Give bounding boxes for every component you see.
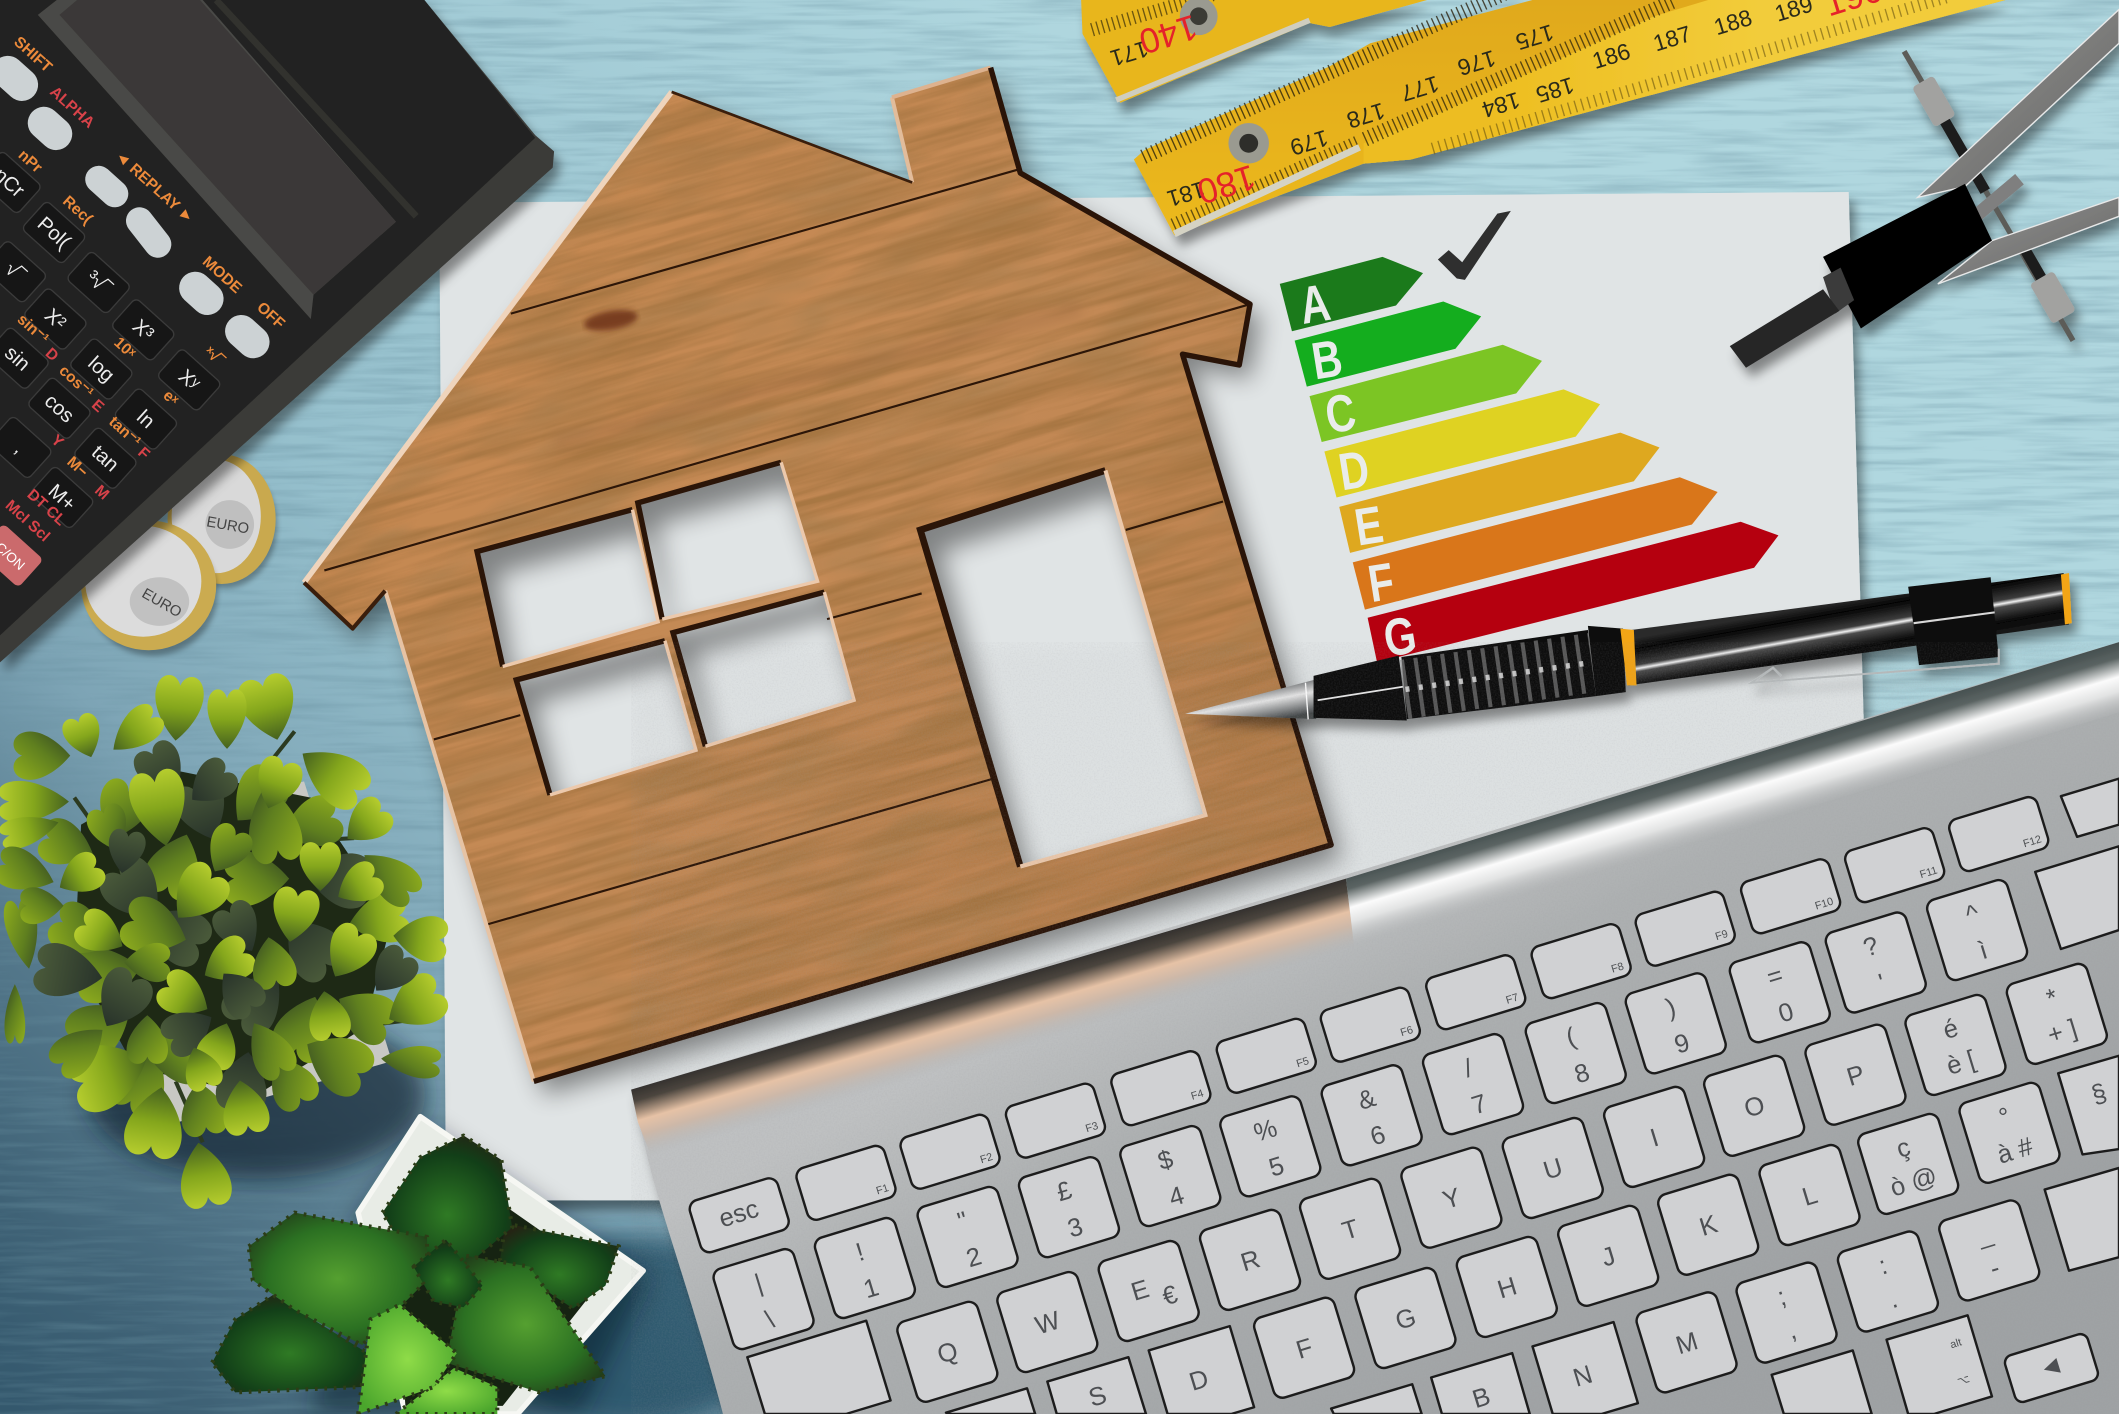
succulent leaves <box>212 1136 619 1414</box>
calculator keys: √‾ <box>0 258 29 287</box>
succulent shadow <box>311 1122 649 1414</box>
house edges <box>304 68 1331 1081</box>
rating bar C <box>1310 345 1542 445</box>
number key row: 8 <box>1571 1058 1593 1089</box>
bottom letter key row: : <box>1876 1252 1891 1281</box>
QWERTY key row: P <box>1844 1060 1868 1092</box>
rating bar D: D <box>1335 438 1373 501</box>
function key row: F5 <box>1295 1055 1311 1070</box>
wireless keyboard <box>631 642 2119 1414</box>
check mark <box>1438 211 1511 280</box>
rating bar D <box>1324 389 1600 501</box>
calculator keys: log <box>83 352 118 387</box>
lower ruler segment: 178 <box>1344 98 1388 134</box>
compass head block <box>1823 184 1992 328</box>
number key row: ( <box>1563 1023 1580 1052</box>
modifier and arrow keys <box>1772 1315 2100 1414</box>
number key row: / <box>1461 1054 1477 1083</box>
lower ruler segment: 185 <box>1533 72 1577 108</box>
number key row: ! <box>853 1238 868 1267</box>
calculator key legends: Rec( <box>59 193 96 228</box>
rating bar G: G <box>1379 605 1420 668</box>
calculator body <box>0 0 554 662</box>
bottom letter key row: B <box>1469 1382 1494 1414</box>
function key row: F1 <box>875 1182 890 1197</box>
QWERTY key row: * <box>2043 984 2061 1013</box>
calculator key legends: sin⁻¹ <box>14 311 52 348</box>
compass arms <box>1918 9 2119 197</box>
wooden house <box>302 66 1354 1106</box>
window frame cut edges <box>477 462 854 795</box>
rating bar A <box>1280 257 1423 335</box>
calculator key legends: cos⁻¹ <box>55 362 97 402</box>
calculator key legends: nPr <box>15 147 45 177</box>
calculator keys: ln <box>132 406 159 433</box>
number key row: ? <box>1860 932 1882 963</box>
keyboard body <box>631 642 2119 1414</box>
lower ruler segment: 181 <box>1164 176 1208 212</box>
function key row: F7 <box>1504 992 1520 1007</box>
function key row: F4 <box>1190 1088 1205 1103</box>
calculator keys: tan <box>87 441 123 476</box>
home key row: D <box>1186 1365 1212 1397</box>
number key row: ) <box>1663 993 1679 1023</box>
QWERTY key row: Y <box>1440 1183 1464 1215</box>
QWERTY key row: Q <box>934 1337 961 1370</box>
foreground leaves <box>0 670 453 1211</box>
background leaves <box>34 736 412 1139</box>
calculator keys: sin <box>0 342 34 376</box>
plant shadow <box>88 1011 426 1179</box>
rating bar E: E <box>1351 494 1387 557</box>
calculator key legends: SHIFT <box>10 33 55 76</box>
function key row: F9 <box>1714 928 1729 943</box>
number key row: 6 <box>1367 1121 1389 1152</box>
calculator keys: , <box>10 438 29 458</box>
upper ruler segment <box>1081 0 1427 103</box>
QWERTY key row: I <box>1647 1124 1662 1153</box>
calculator key legends: tan⁻¹ <box>105 413 144 451</box>
green leafy plant <box>0 670 453 1211</box>
calculator key legends: OFF <box>253 299 288 332</box>
QWERTY key row: E <box>1128 1275 1152 1307</box>
pencil clip <box>1908 577 1999 665</box>
calculator key legends: M <box>91 482 112 503</box>
home key row: ç <box>1893 1133 1914 1164</box>
function key row: F8 <box>1610 960 1625 976</box>
wood texture <box>307 70 1328 1078</box>
calculator keys: Pol( <box>33 213 74 253</box>
bottom letter key row: M <box>1673 1327 1701 1360</box>
calculator key legends: ◄ REPLAY ► <box>111 147 197 227</box>
calculator key legends <box>2 33 288 545</box>
rating bar A: A <box>1295 272 1334 335</box>
number key row: ' <box>1876 969 1889 997</box>
coins <box>81 454 277 656</box>
number key row: ì <box>1976 936 1991 965</box>
calculator key legends: M− <box>63 453 91 481</box>
number key row: 3 <box>1064 1212 1086 1243</box>
calculator key legends: McI Scl <box>2 497 53 545</box>
number key row: = <box>1764 961 1786 992</box>
bottom letter key row: ; <box>1774 1283 1789 1312</box>
bottom letter key row: , <box>1785 1316 1800 1345</box>
calculator key legends: ALPHA <box>46 83 97 132</box>
home key row <box>946 1056 2119 1414</box>
lower ruler segment: 179 <box>1287 125 1331 161</box>
calculator key legends: E <box>88 396 107 416</box>
house shadow <box>315 81 1342 1095</box>
lower ruler segment: 177 <box>1398 71 1442 107</box>
coins: EURO <box>139 586 184 621</box>
rating bar E <box>1339 433 1660 557</box>
calculator keys: Xʸ <box>174 366 204 396</box>
number key row: " <box>954 1207 971 1236</box>
home key row: L <box>1799 1181 1821 1212</box>
adjustment screw <box>1904 51 2076 341</box>
energy rating label <box>1280 211 1778 668</box>
number key row: 4 <box>1166 1181 1188 1212</box>
number key row: ^ <box>1963 899 1982 930</box>
ribbed grip <box>1401 630 1596 719</box>
lower ruler segment: 188 <box>1711 4 1755 40</box>
home key row: ò @ <box>1887 1162 1941 1202</box>
home key row: H <box>1494 1272 1520 1304</box>
number key row: \ <box>762 1305 778 1334</box>
home key row: ° <box>1996 1103 2014 1132</box>
calculator key legends: 10ˣ <box>110 334 139 362</box>
plant pot <box>65 781 392 1125</box>
pencil barrel <box>1628 573 2069 685</box>
home key row: F <box>1293 1333 1316 1365</box>
number key row: £ <box>1053 1176 1075 1207</box>
lower ruler segment: 187 <box>1650 20 1694 56</box>
QWERTY key row <box>747 962 2109 1414</box>
number key row: 9 <box>1671 1029 1693 1060</box>
calculator keys <box>0 150 222 592</box>
function key row: F11 <box>1918 864 1939 881</box>
sheet of paper <box>439 192 1865 1200</box>
bottom letter key row: - <box>1987 1254 2003 1283</box>
number key row: % <box>1251 1114 1281 1148</box>
rating bar C: C <box>1321 382 1360 445</box>
home key row: à # <box>1994 1132 2037 1170</box>
number key row: 0 <box>1775 998 1797 1029</box>
plank seams <box>324 169 1250 925</box>
calculator <box>0 0 554 662</box>
bottom letter key row: N <box>1570 1361 1596 1393</box>
compass handle <box>1823 268 1854 314</box>
calculator key legends: eˣ <box>160 387 182 409</box>
QWERTY key row: + ] <box>2044 1014 2080 1050</box>
bottom letter key row: _ <box>1973 1219 1996 1251</box>
bottom letter key row <box>1331 1168 2119 1414</box>
number key row: $ <box>1155 1145 1177 1176</box>
folding rulers <box>1081 0 2005 235</box>
QWERTY key row: U <box>1540 1153 1566 1185</box>
modifier and arrow keys: ⌥ <box>1956 1373 1971 1388</box>
function key row: F10 <box>1814 896 1835 912</box>
lower ruler segment: 186 <box>1589 38 1633 74</box>
QWERTY key row: O <box>1741 1091 1768 1123</box>
QWERTY key row: T <box>1339 1214 1362 1246</box>
calculator screen <box>38 0 396 319</box>
QWERTY key row: R <box>1238 1245 1263 1277</box>
modifier and arrow keys: ◄ <box>2035 1350 2067 1384</box>
calculator keys: X² <box>40 305 70 335</box>
door cut edges <box>920 470 1205 867</box>
number key row: 5 <box>1266 1152 1288 1183</box>
function key row: F2 <box>979 1151 994 1166</box>
home key row: § <box>2088 1079 2110 1110</box>
function key row <box>687 779 2119 1255</box>
rating bar F: F <box>1364 551 1398 613</box>
function buttons <box>0 49 276 365</box>
home key row: G <box>1392 1303 1420 1336</box>
mechanical pencil <box>1185 573 2072 721</box>
QWERTY key row: € <box>1159 1280 1181 1311</box>
number key row <box>711 846 2119 1351</box>
home key row: S <box>1085 1381 1110 1413</box>
number key row: | <box>752 1269 766 1298</box>
lower ruler segment: 175 <box>1513 19 1557 55</box>
rating bar G <box>1368 522 1778 668</box>
rating bar B: B <box>1308 328 1346 390</box>
calculator key legends: MODE <box>199 253 245 297</box>
succulent in white pot <box>212 1117 649 1414</box>
lower ruler segment <box>1134 0 2005 235</box>
calculator keys: X³ <box>128 315 158 346</box>
calculator key legends: DT CL <box>24 486 69 530</box>
calculator keys: ³√‾ <box>82 267 116 300</box>
keyboard front edge reflection <box>631 642 2119 1157</box>
modifier and arrow keys: alt <box>1949 1336 1963 1351</box>
lower ruler segment: 184 <box>1479 87 1523 123</box>
number key row: & <box>1355 1084 1379 1116</box>
lower ruler segment: 176 <box>1455 45 1499 81</box>
number key row: 2 <box>963 1242 985 1273</box>
bottom letter key row: . <box>1886 1285 1901 1314</box>
function key row: F6 <box>1399 1024 1415 1039</box>
function key row: F3 <box>1084 1120 1100 1135</box>
upper ruler segment: 171 <box>1107 36 1152 72</box>
function key row: F12 <box>2022 833 2043 850</box>
calculator key legends: D <box>42 345 62 365</box>
calculator key legends: F <box>134 444 153 463</box>
dense foliage <box>74 771 392 1095</box>
pencil tip <box>1185 680 1316 719</box>
calculator key legends: ˣ√‾ <box>200 343 228 370</box>
number key row: 1 <box>860 1273 882 1304</box>
rating bar F <box>1353 477 1718 613</box>
pencil cone <box>1314 656 1407 721</box>
calculator key legends: Y <box>48 432 67 452</box>
calculator keys: M+ <box>44 480 80 516</box>
upper ruler segment: 140 <box>1135 7 1202 61</box>
drawing compass <box>1730 9 2119 368</box>
QWERTY key row: è [ <box>1943 1046 1979 1081</box>
calculator keys: cos <box>40 390 78 428</box>
coins: EURO <box>205 514 250 538</box>
QWERTY key row: W <box>1032 1306 1064 1340</box>
number key row: 7 <box>1468 1089 1490 1120</box>
function key row: esc <box>716 1195 762 1233</box>
QWERTY key row: é <box>1940 1014 1962 1045</box>
home key row: K <box>1696 1210 1721 1242</box>
rating bar B <box>1295 301 1481 390</box>
lower ruler segment: 180 <box>1193 157 1260 211</box>
white pot <box>358 1117 643 1414</box>
home key row: J <box>1598 1242 1619 1273</box>
